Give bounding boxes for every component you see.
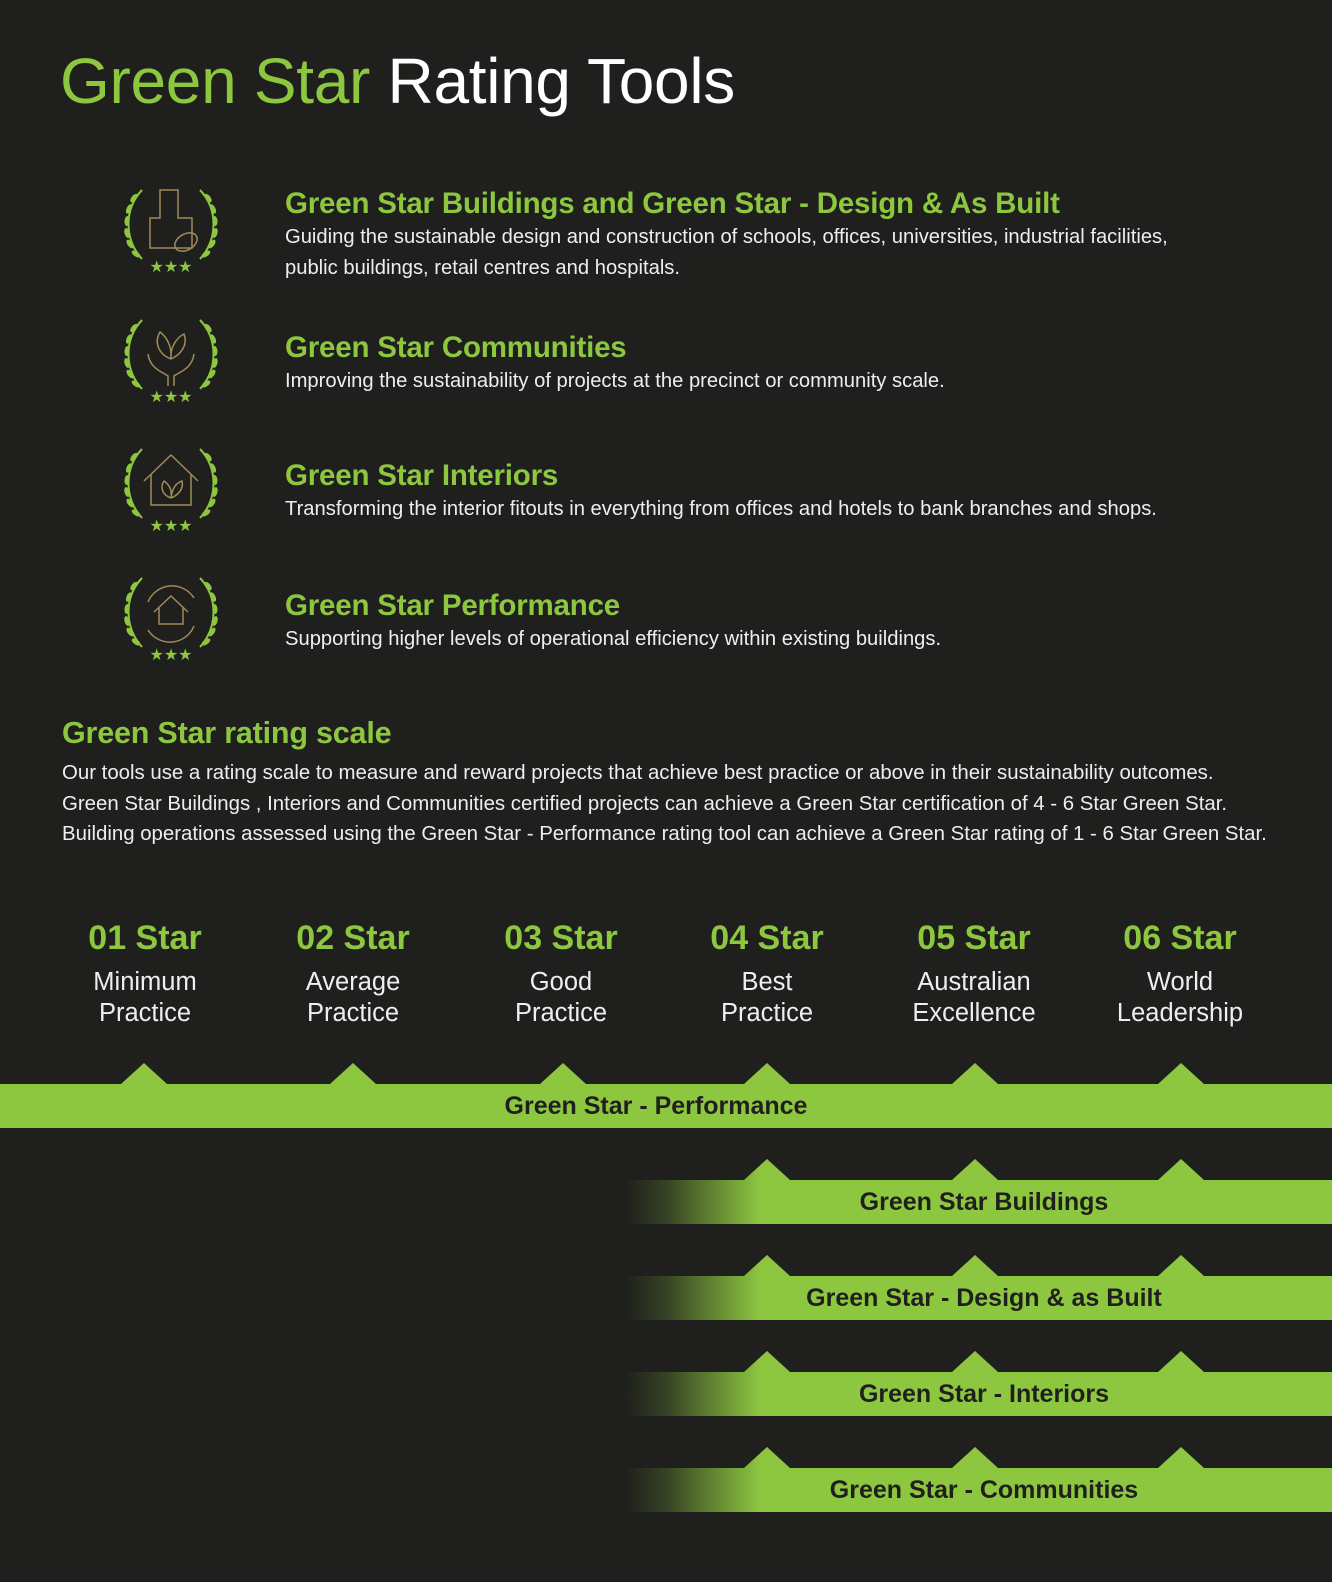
- star levels: [88, 919, 1243, 1027]
- bar: performance: Green Star - Performance: [505, 1092, 808, 1120]
- star levels: Minimum: [93, 968, 197, 996]
- star levels: Average: [306, 968, 400, 996]
- tool: communities: Green Star Communities: [285, 331, 626, 364]
- star levels: World: [1147, 968, 1213, 996]
- rating scale text: Our tools use a rating scale to measure and reward projects that achieve best practice or above in their sustainability outcomes.: [62, 762, 1214, 784]
- tool: buildings: [285, 187, 1168, 279]
- star levels: Best: [741, 968, 793, 996]
- star levels: 06 Star: [1123, 919, 1237, 957]
- tool: performance: Supporting higher levels of operational efficiency within existing buildings.: [285, 628, 941, 650]
- tool: communities: [285, 331, 945, 392]
- rating scale text: Building operations assessed using the Green Star - Performance rating tool can achieve a Green Star rating of 1 - 6 Star Green Star.: [62, 823, 1267, 845]
- star levels: 04 Star: [710, 919, 824, 957]
- bar: buildings: [625, 1159, 1332, 1224]
- star levels: Good: [530, 968, 592, 996]
- tool: buildings: Guiding the sustainable design and construction of schools, offices, universities, industrial facilities,: [285, 226, 1168, 248]
- tool: buildings: Green Star Buildings and Green Star - Design & As Built: [285, 187, 1060, 220]
- tool: interiors: Transforming the interior fitouts in everything from offices and hotels to bank branches and shops.: [285, 498, 1157, 520]
- rating scale text: Green Star Buildings , Interiors and Communities certified projects can achieve a Green Star certification of 4 - 6 Star Green Star.: [62, 792, 1227, 814]
- rating scale heading: Green Star rating scale: [62, 716, 391, 750]
- star levels: Practice: [721, 999, 813, 1027]
- bar: design as built: [625, 1255, 1332, 1320]
- bar: communities: Green Star - Communities: [830, 1476, 1138, 1504]
- star levels: Practice: [515, 999, 607, 1027]
- star levels: Excellence: [912, 999, 1036, 1027]
- tool: communities: Improving the sustainability of projects at the precinct or community scale.: [285, 370, 945, 392]
- star levels: 02 Star: [296, 919, 410, 957]
- rating scale text: [62, 762, 1267, 845]
- title: Green Star Rating Tools: [60, 45, 735, 117]
- star levels: 03 Star: [504, 919, 618, 957]
- icon: performance: [124, 577, 218, 660]
- star levels: Practice: [99, 999, 191, 1027]
- bar: design as built: Green Star - Design & as Built: [806, 1284, 1162, 1312]
- bars chart: [0, 1063, 1332, 1512]
- star levels: Leadership: [1117, 999, 1243, 1027]
- icon: interiors: [124, 448, 218, 531]
- tool: performance: Green Star Performance: [285, 589, 620, 622]
- star levels: 05 Star: [917, 919, 1031, 957]
- star levels: 01 Star: [88, 919, 202, 957]
- bar: interiors: Green Star - Interiors: [859, 1380, 1109, 1408]
- tool: interiors: Green Star Interiors: [285, 459, 558, 492]
- bar: buildings: Green Star Buildings: [860, 1188, 1108, 1216]
- star levels: Practice: [307, 999, 399, 1027]
- bar: performance: [0, 1063, 1332, 1128]
- icon: buildings: [124, 189, 218, 272]
- star levels: Australian: [917, 968, 1031, 996]
- tool: buildings: public buildings, retail centres and hospitals.: [285, 257, 680, 279]
- bar: interiors: [625, 1351, 1332, 1416]
- tool: performance: [285, 589, 941, 650]
- icon: communities: [124, 319, 218, 402]
- bar: communities: [625, 1447, 1332, 1512]
- tool: interiors: [285, 459, 1157, 520]
